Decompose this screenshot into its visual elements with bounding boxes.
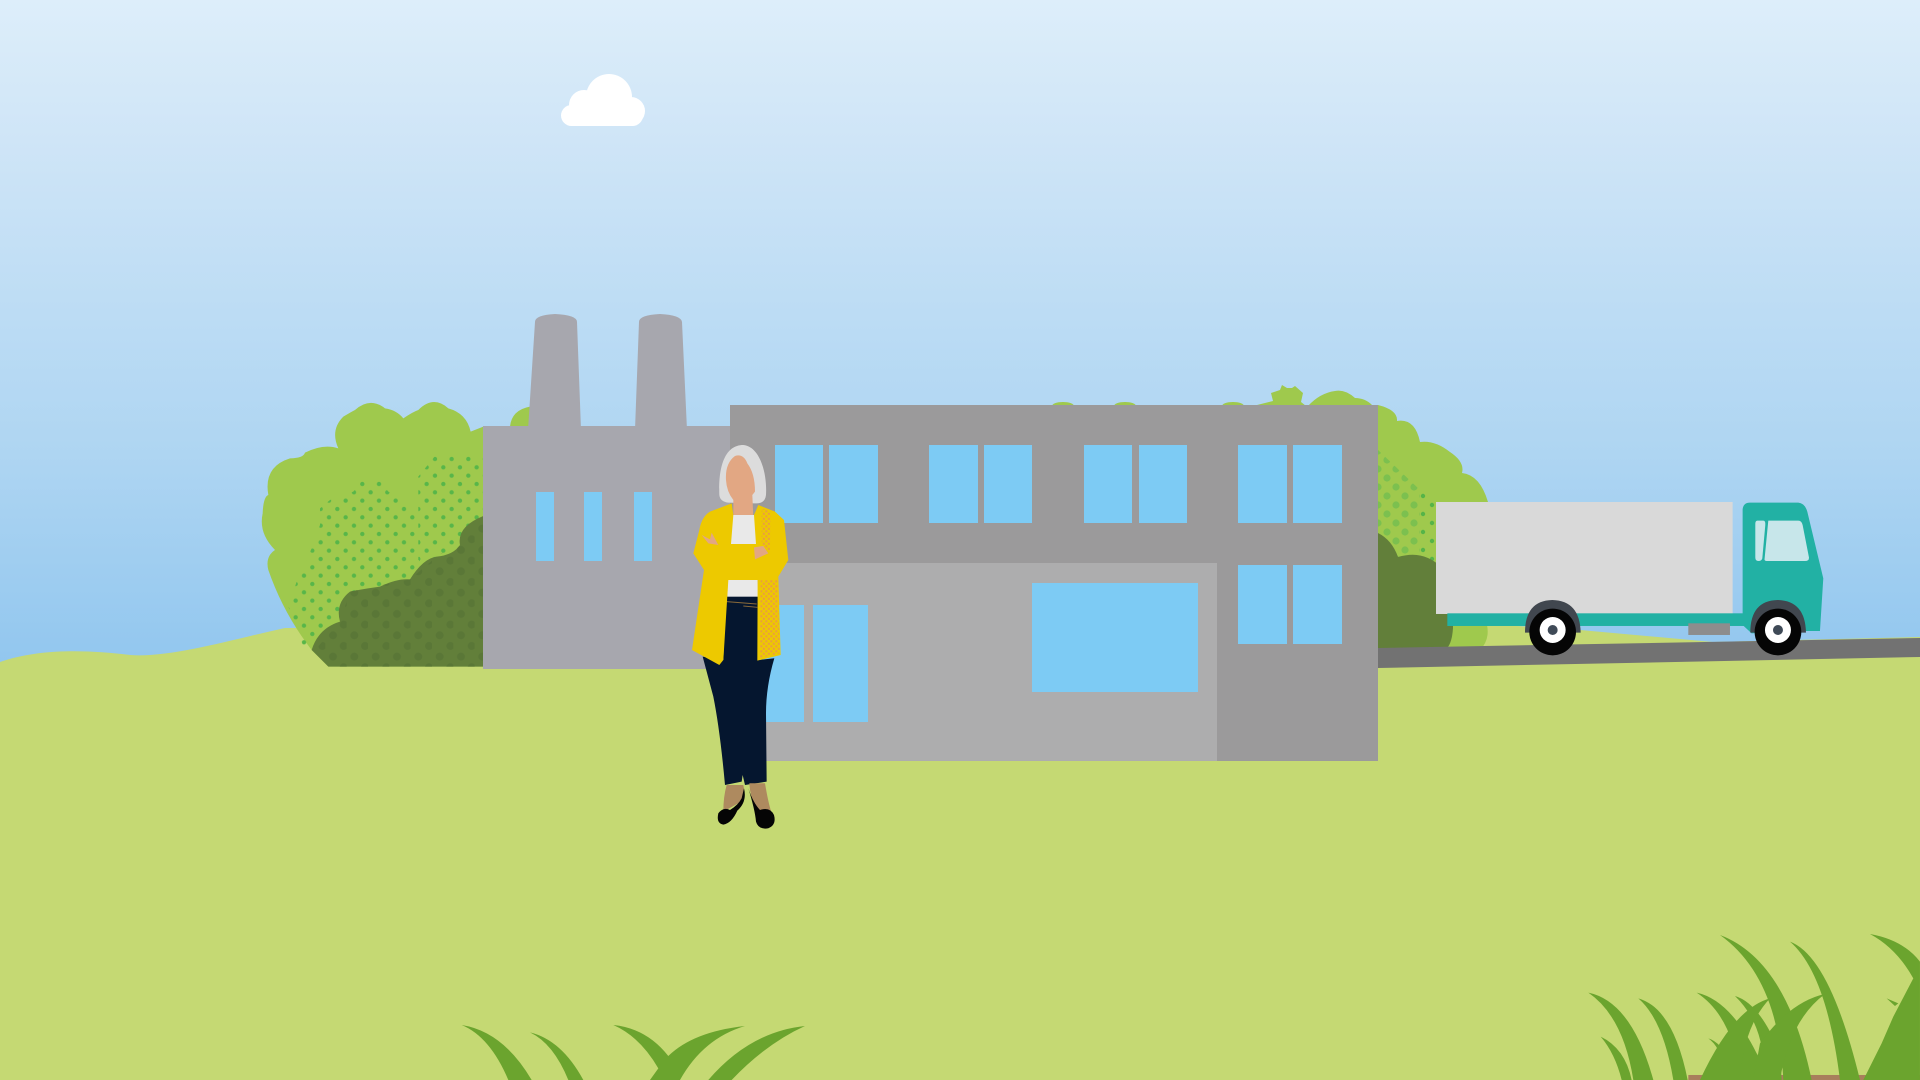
- hair: [719, 445, 766, 503]
- dark shrub: [1378, 533, 1453, 650]
- grass blades: [1588, 934, 1920, 1080]
- sky: [0, 0, 1920, 700]
- chimney left: [528, 314, 581, 430]
- lower light section: [760, 563, 1217, 761]
- road: [1378, 638, 1920, 668]
- office building: [730, 405, 1378, 761]
- building body: [730, 405, 1378, 761]
- upper windows: [775, 445, 1342, 523]
- dark shrub dots: [315, 520, 483, 667]
- factory windows: [536, 492, 652, 561]
- ground: [0, 624, 1920, 1080]
- cab: [1743, 503, 1823, 633]
- right hand: [754, 546, 768, 559]
- cloud: [561, 74, 645, 126]
- face and neck: [726, 455, 755, 517]
- windscreen: [1764, 521, 1809, 561]
- chimney right: [635, 314, 687, 430]
- ankles: [723, 783, 772, 813]
- truck: [1436, 502, 1823, 655]
- dotted shading large: [1378, 450, 1420, 570]
- rear wheel: [1525, 600, 1581, 655]
- jacket pattern lower: [760, 580, 780, 658]
- bush top bumps: [1052, 385, 1372, 410]
- factory body: [483, 426, 743, 669]
- lower right windows: [1238, 565, 1342, 644]
- dotted shading right: [418, 456, 483, 560]
- cargo box: [1436, 502, 1733, 614]
- woman with crossed arms: [692, 445, 788, 829]
- white top: [727, 515, 758, 597]
- dotted shading small: [1420, 490, 1437, 570]
- soil strip: [1688, 1075, 1920, 1080]
- left bush: [262, 402, 530, 667]
- bush foliage: [262, 402, 530, 667]
- front wheel: [1750, 600, 1806, 655]
- dotted shading left: [288, 481, 420, 647]
- factory: [483, 314, 743, 669]
- grass bottom right: [1588, 934, 1920, 1080]
- jacket: [692, 503, 788, 665]
- belt: [727, 602, 757, 607]
- bush foliage: [1378, 405, 1488, 650]
- jacket pattern upper: [762, 508, 771, 553]
- right bush: [1052, 385, 1488, 650]
- trousers: [703, 597, 774, 785]
- dark shrub: [312, 516, 483, 667]
- step: [1688, 623, 1730, 635]
- large window: [1032, 583, 1198, 692]
- shoes: [718, 788, 775, 829]
- side window: [1755, 521, 1765, 561]
- chassis: [1447, 613, 1747, 626]
- left hand: [702, 533, 718, 545]
- lower left windows: [760, 605, 868, 722]
- grass bottom left: [462, 1025, 805, 1080]
